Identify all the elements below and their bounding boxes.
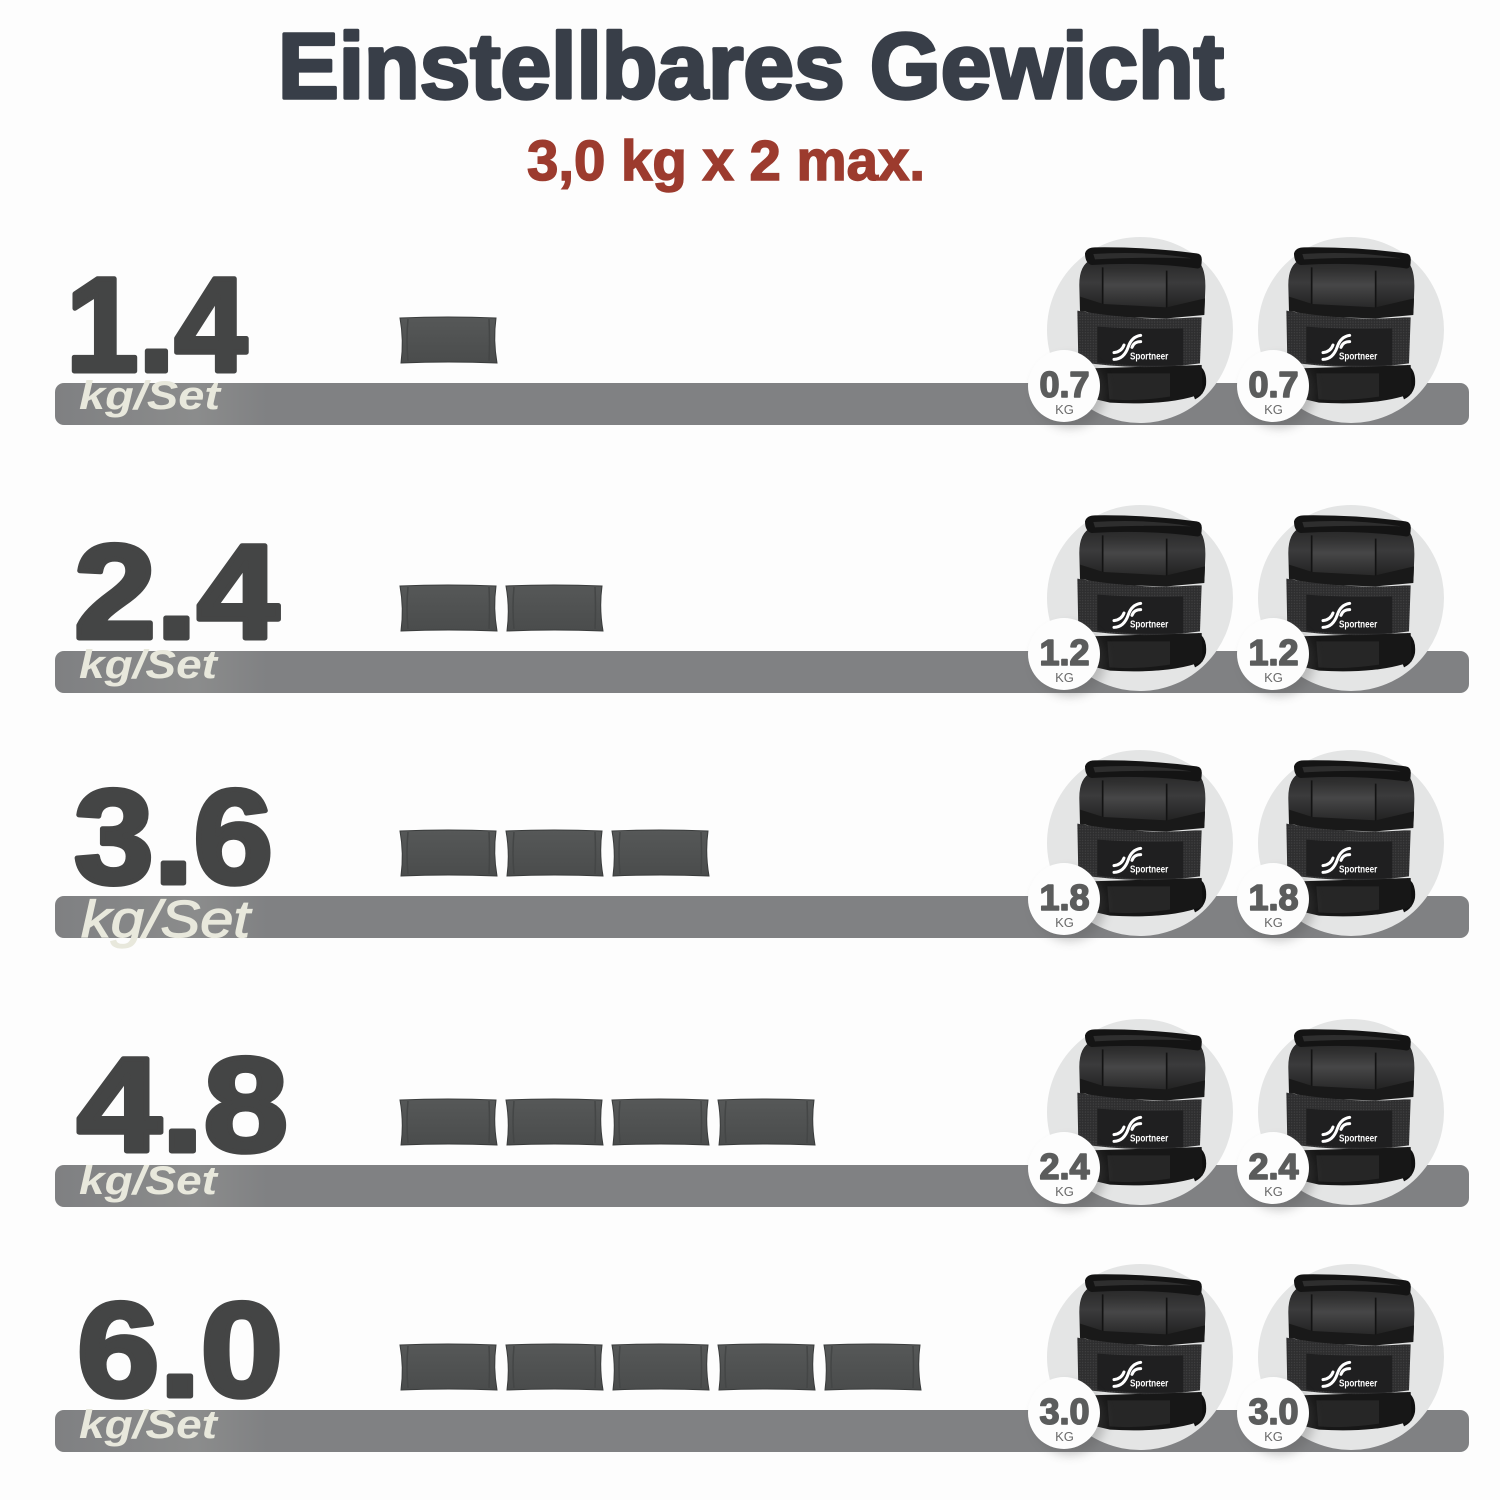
ankle weight left: Sportneer (1130, 619, 1168, 630)
total weight number: 2.4 (74, 518, 279, 667)
unit label: kg/Set (79, 1403, 219, 1447)
weight bags (400, 1099, 815, 1145)
ankle weight right: Sportneer (1339, 1133, 1377, 1144)
ankle weight right: KG (1264, 1184, 1283, 1199)
weight bags (400, 830, 709, 876)
ankle weight right (1237, 237, 1444, 428)
ankle weight right (1237, 750, 1444, 941)
bar (55, 1410, 1469, 1452)
unit label: kg/Set (79, 374, 222, 418)
subtitle: 3,0 kg x 2 max. (527, 129, 925, 193)
ankle weight left: Sportneer (1130, 1133, 1168, 1144)
total weight number: 3.6 (74, 763, 273, 912)
ankle weight left: KG (1055, 1429, 1074, 1444)
title: Einstellbares Gewicht (278, 14, 1224, 118)
ankle weight right: KG (1264, 1429, 1283, 1444)
ankle weight left: Sportneer (1130, 1378, 1168, 1389)
ankle weight right: 1.2 (1248, 632, 1299, 673)
ankle weight right: Sportneer (1339, 864, 1377, 875)
ankle weight left: KG (1055, 1184, 1074, 1199)
ankle weight left: 0.7 (1039, 364, 1090, 405)
ankle weight right: Sportneer (1339, 351, 1377, 362)
ankle weight right: 1.8 (1248, 877, 1299, 918)
unit label: kg/Set (79, 643, 219, 687)
ankle weight right (1237, 505, 1444, 696)
ankle weight left (1028, 237, 1233, 428)
total weight number: 4.8 (77, 1031, 288, 1180)
row: 6.0 kg per set (55, 1264, 1469, 1455)
ankle weight left (1028, 1019, 1233, 1210)
bar (55, 896, 1469, 938)
bar (55, 651, 1469, 693)
ankle weight right: KG (1264, 670, 1283, 685)
unit label: kg/Set (81, 891, 253, 949)
weight bags (400, 585, 603, 631)
ankle weight right: Sportneer (1339, 619, 1377, 630)
unit label: kg/Set (79, 1159, 219, 1203)
ankle weight left: 3.0 (1039, 1391, 1090, 1432)
ankle weight left: KG (1055, 670, 1074, 685)
row: 3.6 kg per set (55, 750, 1469, 949)
ankle weight left: KG (1055, 402, 1074, 417)
ankle weight left: Sportneer (1130, 864, 1168, 875)
ankle weight left (1028, 1264, 1233, 1455)
ankle weight right: 0.7 (1248, 364, 1299, 405)
ankle weight left: 1.2 (1039, 632, 1090, 673)
ankle weight left: KG (1055, 915, 1074, 930)
weight bags (400, 1344, 921, 1390)
row: 2.4 kg per set (55, 505, 1469, 696)
ankle weight right (1237, 1019, 1444, 1210)
ankle weight right (1237, 1264, 1444, 1455)
ankle weight left (1028, 505, 1233, 696)
ankle weight left: 2.4 (1039, 1146, 1090, 1187)
ankle weight right: 2.4 (1248, 1146, 1299, 1187)
total weight number: 6.0 (77, 1276, 283, 1425)
ankle weight left (1028, 750, 1233, 941)
bar (55, 1165, 1469, 1207)
weight bags (400, 317, 497, 363)
ankle weight left: Sportneer (1130, 351, 1168, 362)
ankle weight right: 3.0 (1248, 1391, 1299, 1432)
total weight number: 1.4 (66, 251, 247, 400)
ankle weight right: KG (1264, 402, 1283, 417)
row: 1.4 kg per set (55, 237, 1469, 428)
bar (55, 383, 1469, 425)
ankle weight right: Sportneer (1339, 1378, 1377, 1389)
ankle weight right: KG (1264, 915, 1283, 930)
ankle weight left: 1.8 (1039, 877, 1090, 918)
row: 4.8 kg per set (55, 1019, 1469, 1210)
